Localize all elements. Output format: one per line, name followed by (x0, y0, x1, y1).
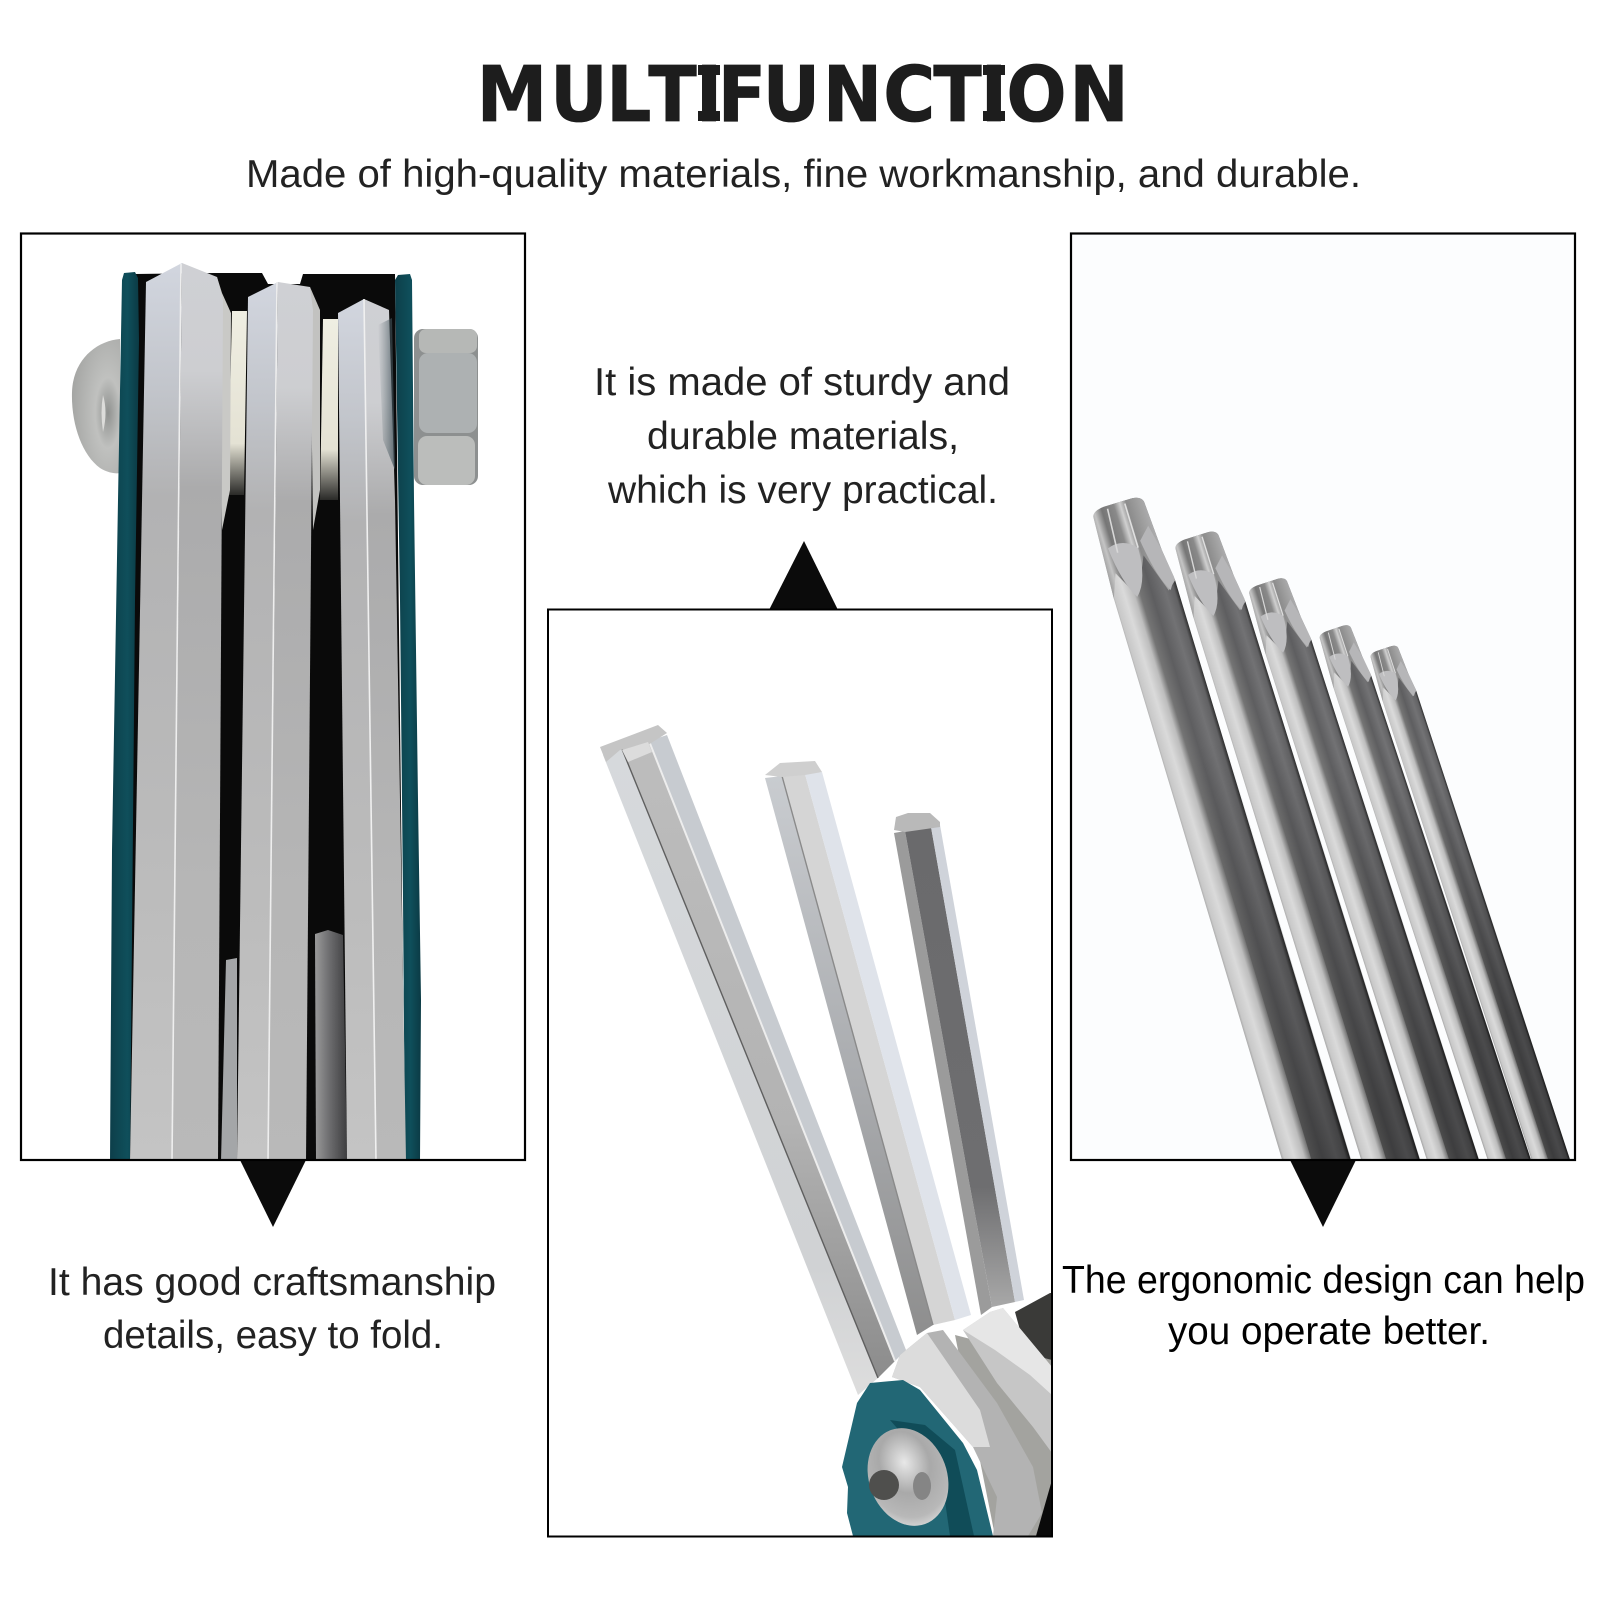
icon: torx bit four (1320, 625, 1531, 1159)
subtitle: Made of high-quality materials, fine workmanship, and durable. (246, 153, 1361, 196)
icon: bolt head (72, 339, 120, 473)
text block: middle caption: It is made of sturdy and (594, 361, 1010, 404)
icon: hex key three (338, 299, 406, 1161)
icon: socket screw (868, 1428, 948, 1526)
icon: torx bit one (1093, 498, 1351, 1159)
panel: opened hex keys (548, 610, 1052, 1537)
icon: long hex key (600, 725, 906, 1395)
text block: left caption: details, easy to fold. (103, 1314, 443, 1357)
text block: middle caption: durable materials, (647, 415, 959, 458)
icon: cream inner plates (228, 311, 338, 500)
arrow: middle panel pointer (769, 541, 838, 610)
icon: teal handle (842, 1380, 993, 1536)
text block: right caption: you operate better. (1168, 1310, 1490, 1353)
text block: left caption (48, 1261, 496, 1357)
icon: black inner channel (120, 273, 405, 1161)
arrow: right panel pointer (1290, 1160, 1356, 1227)
text block: middle caption: which is very practical. (607, 469, 998, 512)
text block: middle caption (594, 361, 1010, 512)
icon: small dark key (315, 930, 347, 1161)
panel: folded hex key set (21, 234, 525, 1161)
icon: silver hex shoulders (892, 1293, 1052, 1536)
icon: small hidden key (221, 958, 237, 1161)
title: MULTIFUNCTION (477, 50, 1129, 140)
icon: short hex key (894, 813, 1024, 1315)
icon: torx bit five (1370, 646, 1570, 1159)
arrow: left panel pointer (240, 1160, 306, 1227)
icon: teal handle left (110, 272, 139, 1161)
icon: torx bit two (1175, 532, 1420, 1159)
icon: hex key two (237, 282, 320, 1161)
icon: torx bit three (1249, 578, 1479, 1159)
icon: teal handle right (395, 274, 421, 1161)
text block: right caption (1062, 1259, 1585, 1353)
icon: hex key one (130, 263, 231, 1161)
icon: medium hex key (765, 761, 971, 1335)
panel: torx bits (1070, 232, 1576, 1162)
icon: hex nut (414, 329, 478, 485)
text block: right caption: The ergonomic design can help (1062, 1259, 1585, 1302)
text block: left caption: It has good craftsmanship (48, 1261, 496, 1304)
